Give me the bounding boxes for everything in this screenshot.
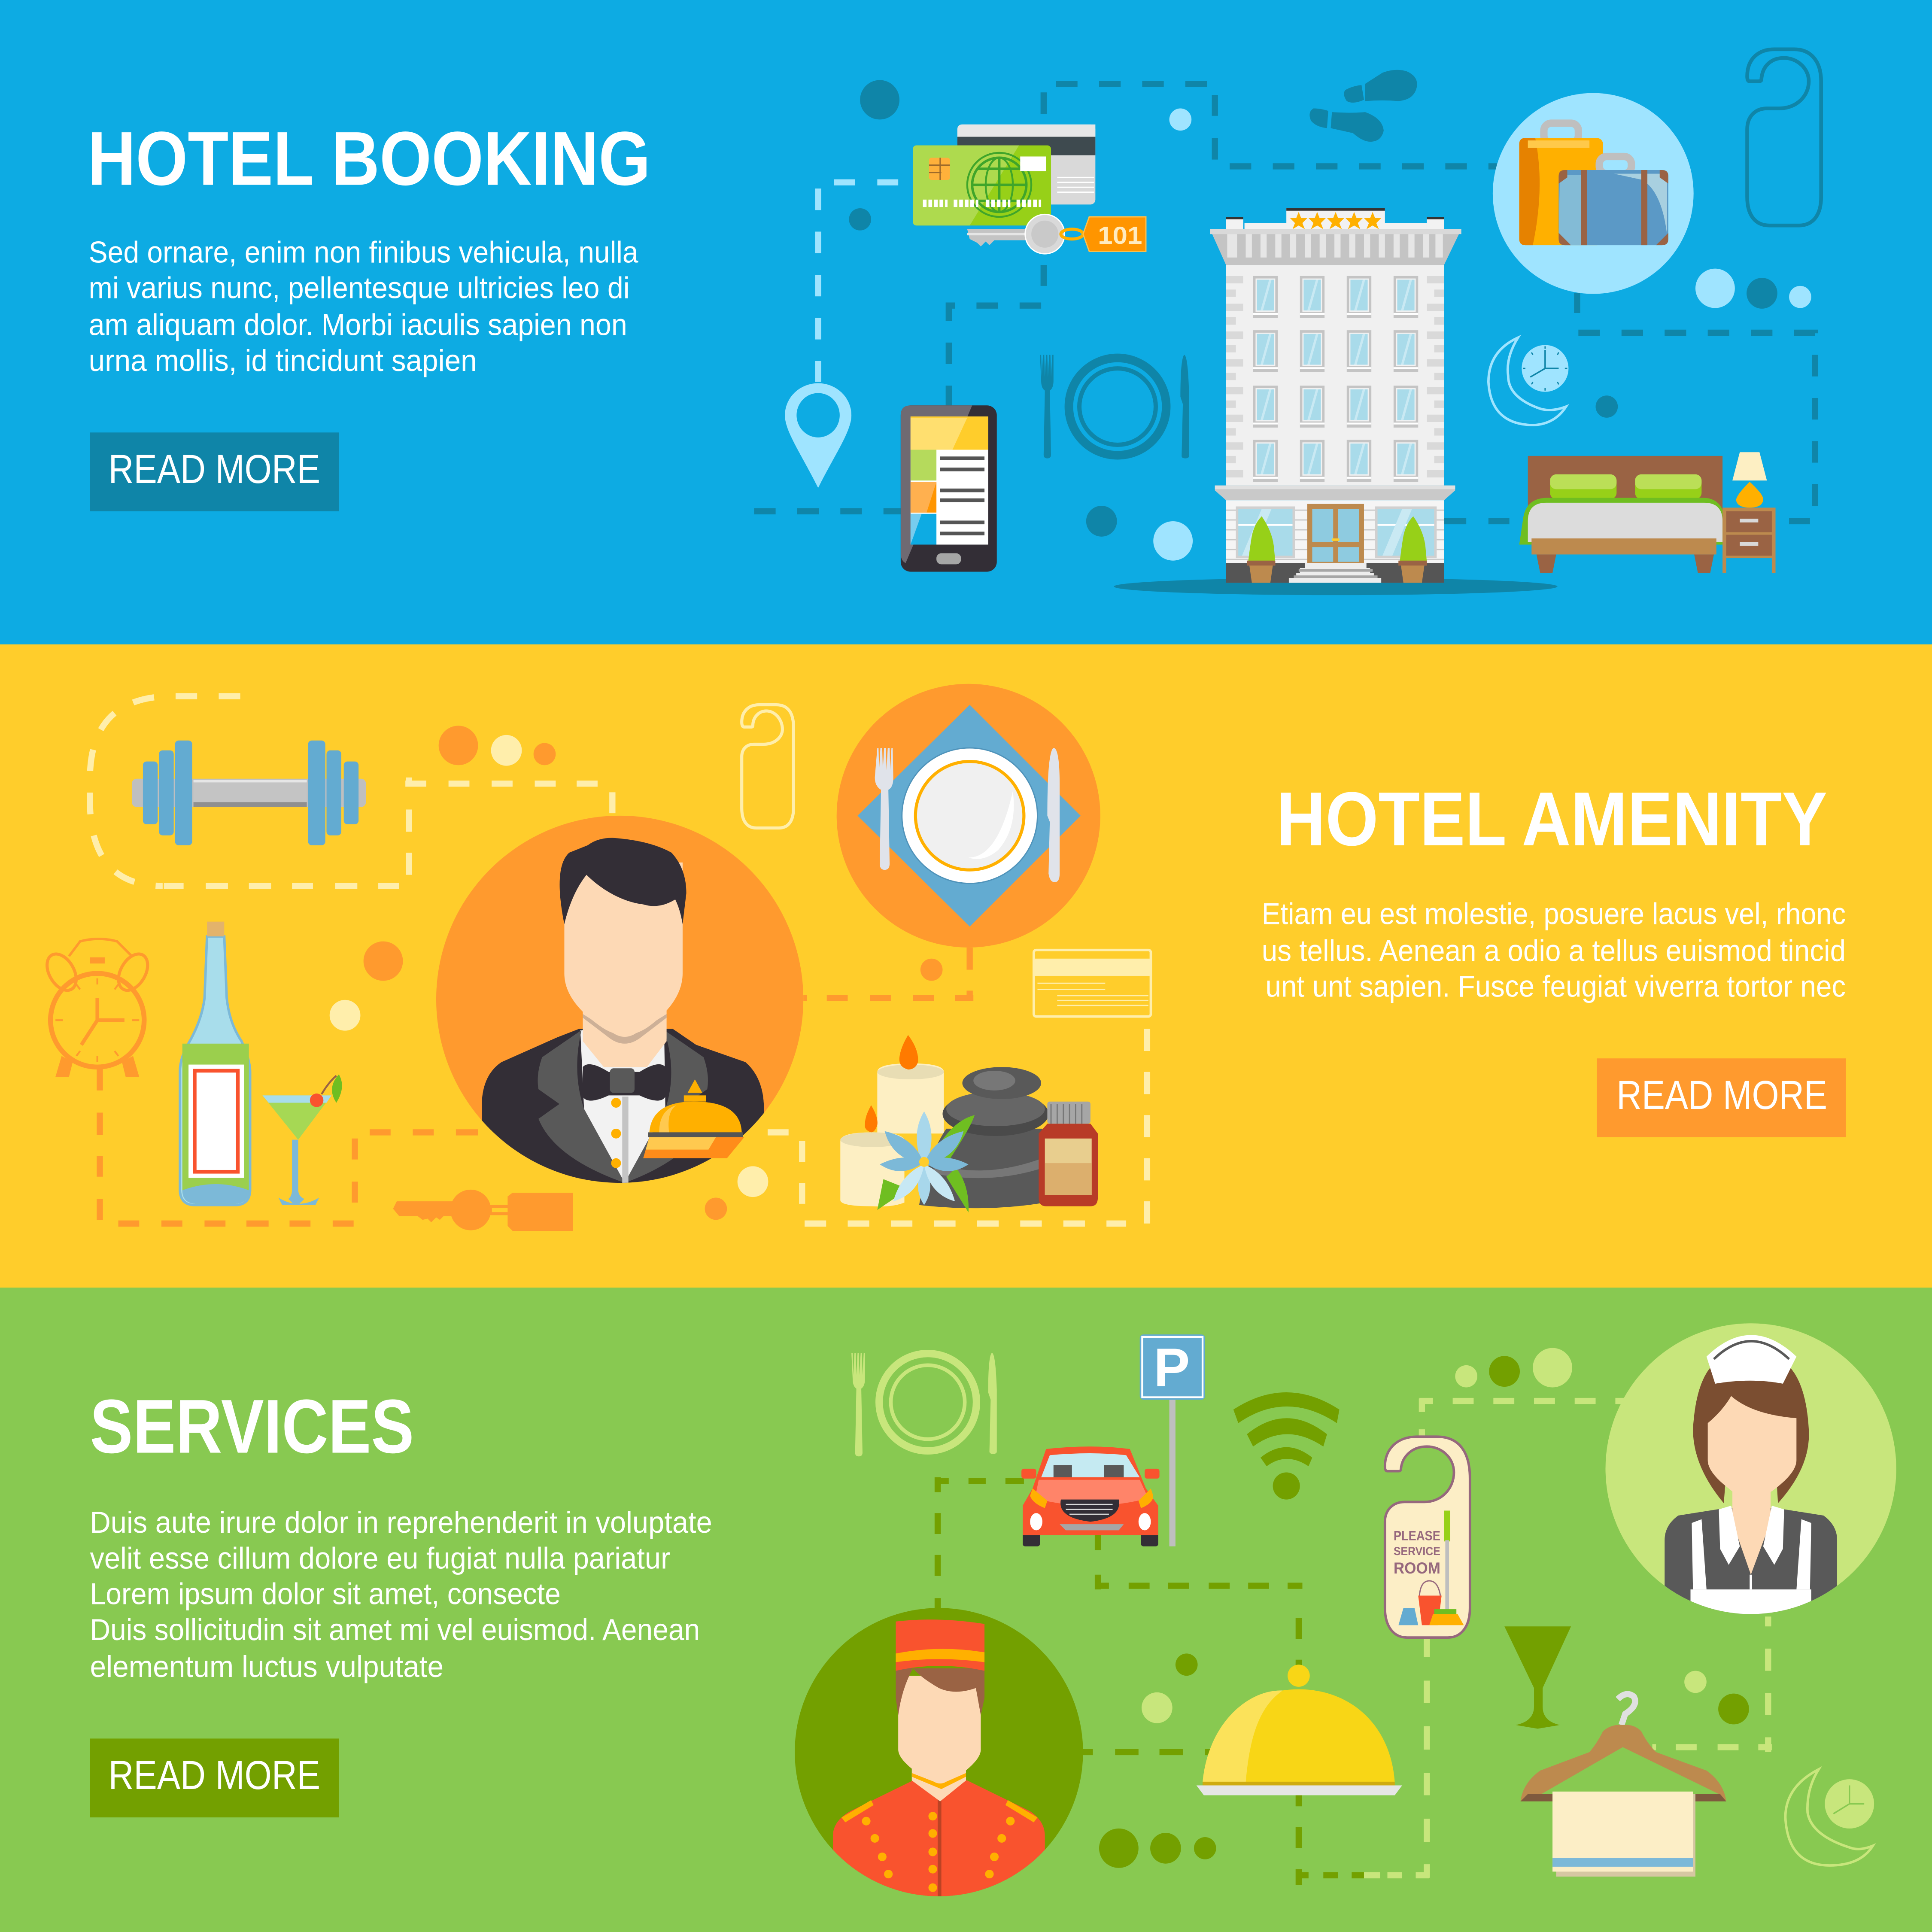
oil bottle bbox=[1039, 1102, 1098, 1206]
icon: suitcases bbox=[1493, 93, 1694, 294]
spa stones bbox=[919, 1067, 1048, 1208]
lamp bbox=[1732, 452, 1767, 507]
icon: room key and tag bbox=[967, 214, 1146, 254]
text block: amenity description: unt unt sapien. Fusce feugiat viverra tortor nec bbox=[1265, 969, 1846, 1003]
butler face and hair bbox=[560, 838, 687, 1067]
potted trees bbox=[1247, 516, 1427, 583]
text block: booking description: urna mollis, id tincidunt sapien bbox=[89, 343, 477, 377]
icon: wifi bbox=[1233, 1392, 1340, 1500]
cream dashed routes bbox=[90, 696, 1147, 1224]
light dashed route bbox=[818, 182, 898, 382]
text block: amenity description bbox=[1262, 896, 1846, 1003]
icon: martini glass bbox=[1504, 1626, 1571, 1728]
hotel door bbox=[1307, 504, 1364, 564]
icon: parking sign: P bbox=[1154, 1337, 1190, 1398]
text block: services description: Lorem ipsum dolor sit amet, consecte bbox=[90, 1577, 561, 1611]
text block: services description: Duis sollicitudin sit amet mi vel euismod. Aenean bbox=[90, 1613, 700, 1646]
button: read more bbox=[1597, 1058, 1846, 1137]
hanger text: SERVICE bbox=[1394, 1544, 1440, 1558]
orange dashed routes bbox=[100, 948, 973, 1224]
icon: coat hanger with towel bbox=[1520, 1694, 1726, 1877]
icon: butler portrait bbox=[436, 816, 803, 1183]
bow tie bbox=[583, 1064, 665, 1101]
panel: services bbox=[0, 1288, 1932, 1932]
title: hotel booking: HOTEL BOOKING bbox=[88, 115, 650, 201]
hanger text bbox=[1394, 1528, 1440, 1577]
hanger text: PLEASE bbox=[1394, 1528, 1440, 1543]
icon: credit cards bbox=[913, 125, 1095, 225]
button: read more: READ MORE bbox=[1616, 1072, 1827, 1118]
text block: amenity description: us tellus. Aenean a odio a tellus euismod tincid bbox=[1262, 934, 1846, 968]
service bell bbox=[643, 1079, 744, 1158]
icon: door hanger outline bbox=[742, 705, 793, 828]
text block: amenity description: Etiam eu est molestie, posuere lacus vel, rhonc bbox=[1262, 896, 1846, 930]
icon: door hanger outline bbox=[1747, 49, 1821, 225]
text block: services description: Duis aute irure dolor in reprehenderit in voluptate bbox=[90, 1505, 712, 1539]
decorative dots bbox=[1099, 1348, 1749, 1868]
text block: booking description bbox=[89, 235, 638, 377]
maid cap bbox=[1707, 1335, 1796, 1384]
panel: hotel amenity bbox=[0, 644, 1932, 1288]
button: read more: READ MORE bbox=[109, 447, 320, 492]
icon: bottle bbox=[180, 922, 250, 1205]
button: read more bbox=[90, 432, 339, 511]
icon: dumbbell bbox=[132, 741, 366, 845]
spa flower bbox=[877, 1112, 975, 1212]
icon: orange key and tag bbox=[393, 1190, 573, 1231]
icon: bellhop portrait bbox=[795, 1608, 1083, 1898]
text block: booking description: Sed ornare, enim non finibus vehicula, nulla bbox=[89, 235, 638, 269]
hotel steps bbox=[1289, 563, 1381, 583]
title: services: SERVICES bbox=[90, 1384, 414, 1469]
text block: services description: elementum luctus vulputate bbox=[90, 1649, 444, 1683]
icon: cutlery and plate bbox=[851, 1353, 997, 1456]
hotel star sign bbox=[1286, 208, 1385, 231]
text block: services description: velit esse cillum dolore eu fugiat nulla pariatur bbox=[90, 1541, 670, 1575]
icon: credit card outline bbox=[1034, 950, 1151, 1017]
text block: booking description: mi varius nunc, pellentesque ultricies leo di bbox=[89, 271, 630, 305]
icon: footprints bbox=[1309, 70, 1417, 142]
button: read more: READ MORE bbox=[109, 1753, 320, 1798]
text block: booking description: am aliquam dolor. Morbi iaculis sapien non bbox=[89, 308, 627, 342]
icon: spa candles and stones bbox=[840, 1035, 1098, 1212]
icon: moon and clock bbox=[1488, 337, 1568, 425]
dashed route lines bbox=[754, 84, 1815, 521]
button: read more bbox=[90, 1738, 339, 1817]
shirt buttons bbox=[611, 1098, 621, 1168]
icon: room key and tag: 101 bbox=[1098, 222, 1142, 249]
dark dashed routes bbox=[935, 1477, 1364, 1885]
light dashed routes bbox=[1364, 1398, 1772, 1878]
icon: cocktail glass bbox=[262, 1075, 342, 1205]
cleaning tools bbox=[1398, 1510, 1464, 1625]
icon: serving cloche bbox=[1197, 1665, 1402, 1795]
title: hotel amenity: HOTEL AMENITY bbox=[1276, 776, 1827, 862]
icon: alarm clock bbox=[41, 939, 154, 1077]
decorative dots bbox=[849, 80, 1811, 561]
icon: smartphone bbox=[901, 405, 997, 572]
decorative dots bbox=[330, 726, 942, 1220]
bellhop hat bbox=[896, 1619, 984, 1671]
bellhop face bbox=[896, 1668, 984, 1801]
icon: hotel building bbox=[1114, 208, 1558, 595]
panel: hotel booking bbox=[0, 0, 1932, 644]
text block: services description bbox=[90, 1505, 712, 1683]
icon: red car bbox=[1021, 1446, 1160, 1546]
nightstand bbox=[1722, 507, 1776, 573]
maid hair and face bbox=[1693, 1368, 1809, 1575]
icon: bed and nightstand bbox=[1519, 452, 1776, 573]
fork and knife bbox=[875, 748, 1060, 882]
icon: door hanger please service room bbox=[1385, 1437, 1470, 1637]
hanger text: ROOM bbox=[1394, 1559, 1440, 1577]
icon: maid portrait bbox=[1605, 1323, 1896, 1626]
icon: parking sign bbox=[1140, 1334, 1205, 1546]
icon: moon and clock bbox=[1785, 1769, 1874, 1865]
icon: location pin bbox=[785, 383, 851, 488]
icon: cutlery and plate bbox=[1040, 355, 1189, 459]
icon: plate on napkin bbox=[837, 684, 1100, 948]
